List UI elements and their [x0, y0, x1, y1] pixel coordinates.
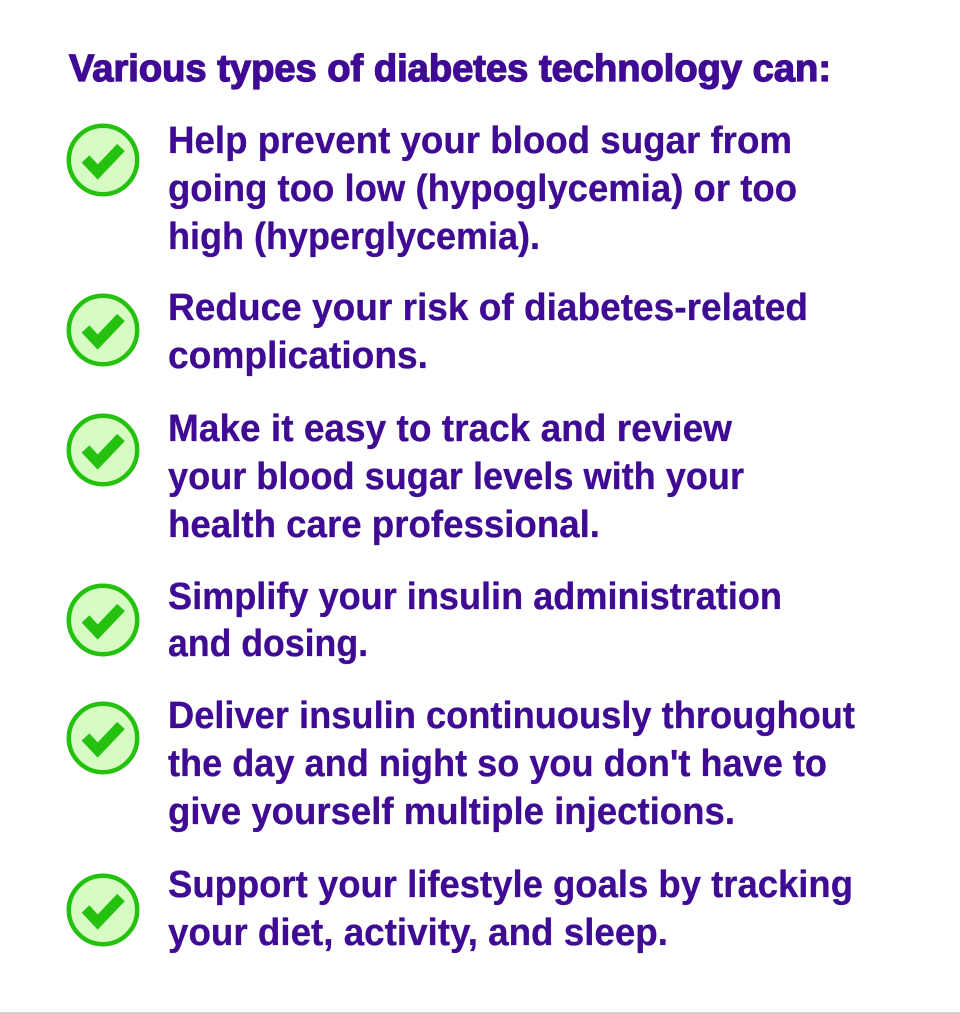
icon: check mark 4	[69, 586, 137, 654]
icon: check mark 6	[69, 876, 137, 944]
text block: deliver insulin: give yourself multiple injections.	[168, 791, 735, 833]
text block: deliver insulin: Deliver insulin continuously throughout	[168, 695, 855, 737]
text block: simplify insulin: and dosing.	[168, 623, 368, 665]
icon: check mark 5	[69, 704, 137, 772]
icon: check mark 2	[69, 296, 137, 364]
text block: deliver insulin: the day and night so you don't have to	[168, 743, 827, 785]
text block: prevent lows and highs: going too low (hypoglycemia) or too	[168, 168, 797, 210]
text block: track and review	[168, 408, 744, 546]
icon: check mark 3	[69, 416, 137, 484]
text block: deliver insulin	[168, 695, 855, 833]
text block: simplify insulin: Simplify your insulin administration	[168, 576, 782, 618]
text block: simplify insulin	[168, 576, 782, 665]
text block: lifestyle goals: Support your lifestyle goals by tracking	[168, 864, 853, 906]
text block: track and review: Make it easy to track and review	[168, 408, 732, 450]
text block: prevent lows and highs: Help prevent your blood sugar from	[168, 120, 792, 162]
text block: prevent lows and highs	[168, 120, 797, 258]
text block: reduce complications: Reduce your risk of diabetes-related	[168, 287, 808, 329]
text block: track and review: your blood sugar levels with your	[168, 456, 744, 498]
icon: check mark 1	[69, 126, 137, 194]
text block: reduce complications	[168, 287, 808, 377]
text block: track and review: health care professional.	[168, 504, 600, 546]
text block: reduce complications: complications.	[168, 335, 428, 377]
text block: prevent lows and highs: high (hyperglycemia).	[168, 216, 540, 258]
text block: lifestyle goals: your diet, activity, and sleep.	[168, 912, 668, 954]
title: Various types of diabetes technology can:	[69, 48, 831, 90]
text block: lifestyle goals	[168, 864, 853, 954]
